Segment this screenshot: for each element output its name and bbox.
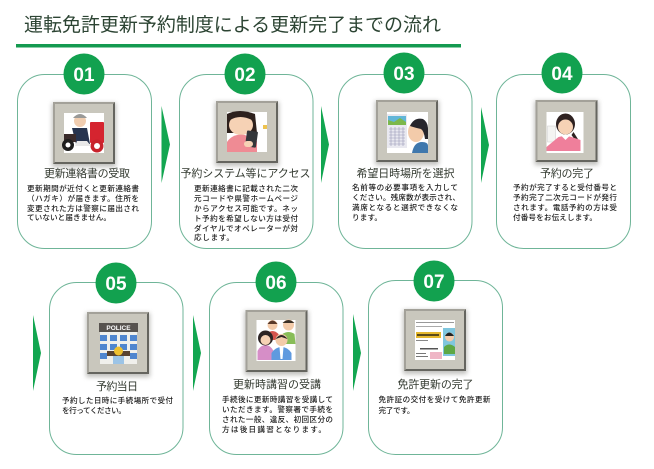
badge: 01 xyxy=(64,54,104,94)
step description: ダイヤルでオペレーターが対 xyxy=(194,223,298,233)
step description: からアクセス可能です。ネッ xyxy=(194,203,298,213)
panel: step 03 xyxy=(338,52,472,248)
icon: group of people xyxy=(244,310,308,375)
step description: 変更された方は警察に届出され xyxy=(27,203,139,213)
panel: step 05 xyxy=(50,262,183,454)
arrow: 04 to 05 xyxy=(33,315,41,391)
step description: された一般、違反、初回区分の xyxy=(222,414,333,424)
badge: 04: 04 xyxy=(551,64,573,85)
icon: police station: POLICE xyxy=(106,325,131,332)
arrow: 03 to 04 xyxy=(481,107,489,183)
step description: されます。電話予約の方は受 xyxy=(513,202,617,212)
badge: 01: 01 xyxy=(73,65,95,86)
step description xyxy=(194,183,298,242)
step heading: 更新連絡書の受取 xyxy=(44,166,130,180)
step description: 手続後に更新時講習を受講して xyxy=(222,394,333,404)
step description: 方は後日講習となります。 xyxy=(222,424,326,434)
panel: step 01 xyxy=(18,54,152,248)
step description: 完了です。 xyxy=(378,406,414,415)
badge: 06: 06 xyxy=(265,273,287,294)
step description: 予約が完了すると受付番号と xyxy=(513,182,617,192)
badge: 05: 05 xyxy=(105,274,127,295)
badge: 03 xyxy=(384,52,424,94)
icon: man looking at calendar xyxy=(375,100,439,165)
step description: （ハガキ）が届きます。住所を xyxy=(27,193,139,203)
badge: 02 xyxy=(224,54,266,94)
badge: 04 xyxy=(542,52,582,94)
badge: 02: 02 xyxy=(234,65,256,86)
step heading: 希望日時場所を選択 xyxy=(356,166,454,180)
panel: step 07 xyxy=(368,260,502,454)
title underline xyxy=(16,44,461,48)
step description xyxy=(513,182,617,222)
step description: ト予約を希望しない方は受付 xyxy=(194,213,298,223)
badge: 06 xyxy=(256,262,296,302)
step description: いただきます。警察署で手続を xyxy=(222,404,333,414)
step description xyxy=(27,183,139,222)
icon: police station xyxy=(86,312,150,377)
icon: woman with smartphone xyxy=(215,101,279,166)
panel: step 02 xyxy=(180,54,313,248)
step description: 満席となると選択できなくな xyxy=(352,202,458,212)
arrow: 05 to 06 xyxy=(193,315,201,391)
panel: step 04 xyxy=(496,52,630,248)
step description xyxy=(62,395,173,415)
step description xyxy=(222,394,333,434)
badge: 07 xyxy=(414,260,454,302)
step description: 免許証の交付を受けて免許更新 xyxy=(378,394,491,404)
badge: 05 xyxy=(96,262,136,304)
step description: 名前等の必要事項を入力して xyxy=(352,182,458,192)
step description: 予約した日時に手続場所で受付 xyxy=(62,395,173,405)
icon: driver's licence card xyxy=(403,309,467,374)
step description: を行ってください。 xyxy=(62,405,126,415)
icon: postman on motorcycle xyxy=(52,102,116,167)
step description: 更新期間が近付くと更新連絡書 xyxy=(27,183,139,193)
step description xyxy=(378,394,491,415)
arrow: 01 to 02 xyxy=(162,106,170,183)
step heading: 更新時講習の受講 xyxy=(233,377,321,391)
step description: 元コードや県警ホームページ xyxy=(194,193,298,203)
step heading: 予約システム等にアクセス xyxy=(180,166,310,180)
step description xyxy=(352,182,460,222)
step heading: 免許更新の完了 xyxy=(398,377,474,391)
step description: ります。 xyxy=(352,213,382,222)
step description: 付番号をお伝えします。 xyxy=(513,212,597,222)
arrow: 02 to 03 xyxy=(321,106,329,183)
arrow: 06 to 07 xyxy=(353,314,361,391)
title: 運転免許更新予約制度による更新完了までの流れ xyxy=(24,14,441,36)
step description: 予約完了二次元コードが発行 xyxy=(513,192,617,202)
step heading: 予約の完了 xyxy=(540,166,594,180)
panel: step 06 xyxy=(210,262,343,454)
step description: 応します。 xyxy=(194,233,234,242)
badge: 07: 07 xyxy=(423,272,445,293)
icon: woman with confirmation xyxy=(534,100,598,165)
badge: 03: 03 xyxy=(393,64,415,85)
step description: 更新連絡書に記載された二次 xyxy=(194,183,298,193)
step description: ください。残席数が表示され、 xyxy=(352,192,460,202)
step heading: 予約当日 xyxy=(96,379,138,393)
step description: ていないと届きません。 xyxy=(27,213,111,222)
